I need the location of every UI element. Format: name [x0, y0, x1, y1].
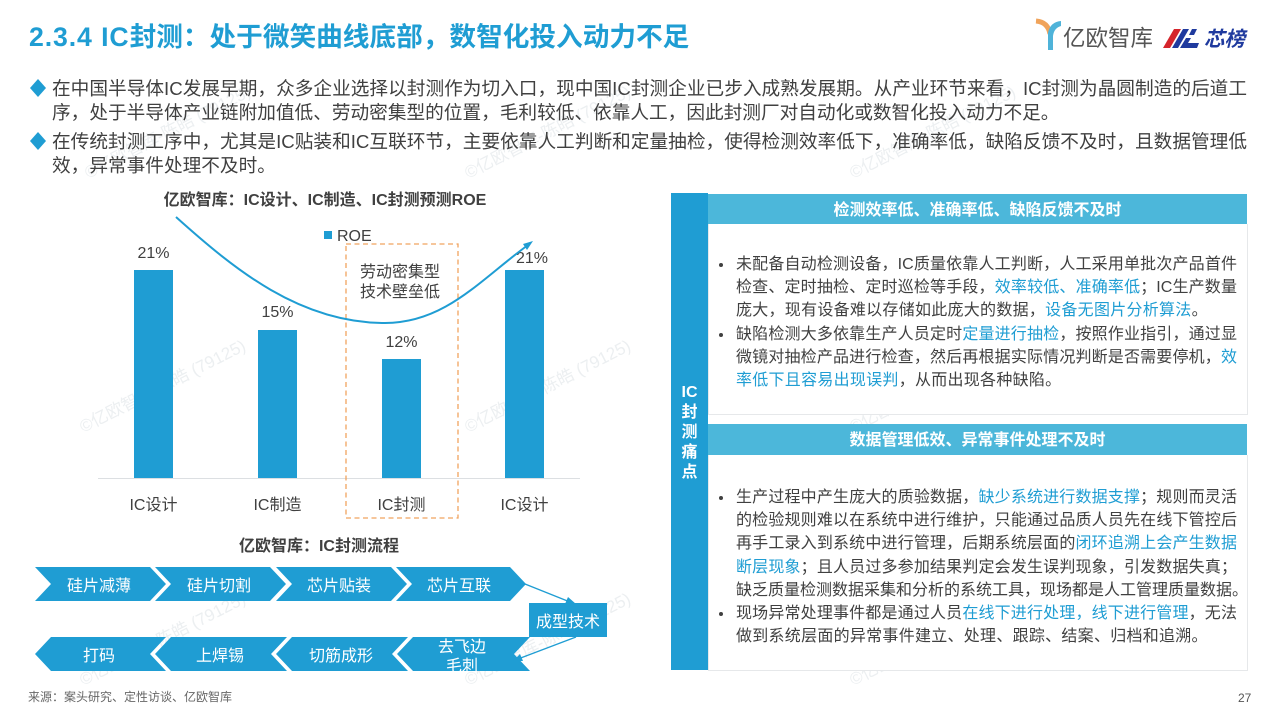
chevron row 1 labels: [67, 577, 491, 595]
chevron row 2: [35, 637, 530, 671]
highlight label: 技术壁垒低: [360, 282, 440, 301]
detection text: [719, 255, 1237, 389]
chevron row 1 labels: 硅片切割: [187, 577, 251, 595]
panel: IC packaging pain points: 点: [681, 464, 698, 481]
data management text: [719, 488, 1248, 645]
legend: ROE: [337, 228, 372, 245]
bullet text block: [52, 78, 1247, 176]
watermarks: ©亿欧智库-陈皓 (79125): [462, 336, 634, 436]
source: 来源：案头研究、定性访谈、亿欧智库: [28, 690, 232, 704]
panel heading: data management: [708, 424, 1247, 455]
chart title: 亿欧智库：IC设计、IC制造、IC封测预测ROE: [164, 190, 487, 209]
chevron row 2 labels: [83, 638, 486, 675]
detection text: 庞大，现有设备难以存储如此庞大的数据，设备无图片分析算法。: [736, 302, 1208, 319]
data management text: 生产过程中产生庞大的质验数据，缺少系统进行数据支撑；规则而灵活: [736, 489, 1237, 506]
flow title: 亿欧智库：IC封测流程: [239, 536, 399, 555]
data management text: 做到系统层面的异常事件建立、处理、跟踪、结案、归档和追溯。: [736, 628, 1208, 645]
data management text: 缺乏质量检测数据采集和分析的系统工具，现场都是人工管理质量数据。: [736, 582, 1248, 599]
highlight label: [360, 263, 440, 301]
watermarks: ©亿欧智库-陈皓 (79125): [77, 589, 249, 689]
chevron row 1: [35, 567, 526, 601]
chevron row 2 labels: 上焊锡: [196, 647, 244, 665]
title: 2.3.4 IC封测：处于微笑曲线底部，数智化投入动力不足: [29, 22, 689, 52]
watermarks: ©亿欧智库-陈皓 (79125): [462, 82, 634, 182]
bullet text block: 效，异常事件处理不及时。: [52, 155, 276, 176]
forming technology box: 成型技术: [536, 613, 600, 631]
logo: Yiou Zhiku and Xinbang: [1036, 18, 1248, 51]
watermarks: ©亿欧智库-陈皓 (79125): [462, 589, 634, 689]
panel box: detection: [708, 224, 1248, 415]
connector arrows: [513, 584, 576, 661]
logo: Yiou Zhiku and Xinbang: 亿欧智库: [1063, 26, 1153, 51]
smile curve arrow: [176, 217, 533, 323]
data management text: 现场异常处理事件都是通过人员在线下进行处理，线下进行管理，无法: [736, 605, 1237, 622]
panel: IC packaging pain points: 痛: [681, 444, 698, 461]
panel: IC packaging pain points: IC: [682, 384, 698, 401]
ROE bar chart: [98, 190, 580, 519]
dashed highlight box: [346, 244, 458, 518]
panel heading: detection: [708, 194, 1247, 224]
category labels: IC设计: [500, 496, 549, 514]
highlight label: 劳动密集型: [360, 263, 440, 281]
category labels: IC制造: [253, 496, 302, 514]
panel heading: detection: 检测效率低、准确率低、缺陷反馈不及时: [833, 202, 1122, 219]
chevron row 1 labels: 芯片互联: [427, 577, 491, 595]
chevron row 2 labels: 打码: [83, 647, 115, 665]
detection text: 未配备自动检测设备，IC质量依靠人工判断，人工采用单批次产品首件: [736, 256, 1237, 273]
panel: IC packaging pain points: 测: [681, 424, 698, 441]
panel: IC packaging pain points: 封: [681, 404, 698, 421]
process flow: [35, 536, 607, 675]
logo: Yiou Zhiku and Xinbang: 芯榜: [1204, 28, 1248, 51]
data management text: 的检验规则难以在系统中进行维护，只能通过品质人员先在线下管控后: [736, 512, 1237, 529]
chevron row 1 labels: 硅片减薄: [67, 577, 131, 595]
watermarks: ©亿欧智库-陈皓 (79125): [82, 82, 254, 182]
chevron row 1 labels: 芯片贴装: [307, 577, 371, 595]
watermarks: ©亿欧智库-陈皓 (79125): [847, 589, 1019, 689]
panel heading: data management: 数据管理低效、异常事件处理不及时: [849, 432, 1106, 449]
value labels: 15%: [261, 304, 294, 321]
panel box: data management: [708, 455, 1248, 671]
value labels: [137, 245, 548, 351]
bullet text block: 序，处于半导体产业链附加值低、劳动密集型的位置，毛利较低、依靠人工，因此封测厂对自动化或数智化投入动力不足。: [52, 102, 1059, 123]
bullet text block: 在中国半导体IC发展早期，众多企业选择以封测作为切入口，现中国IC封测企业已步入成熟发展期。从产业环节来看，IC封测为晶圆制造的后道工: [52, 78, 1247, 99]
value labels: 21%: [516, 250, 548, 267]
watermarks: ©亿欧智库-陈皓 (79125): [847, 336, 1019, 436]
chevron row 2 labels: 去飞边: [438, 638, 486, 656]
bullet text block: 在传统封测工序中，尤其是IC贴装和IC互联环节，主要依靠人工判断和定量抽检，使得检测效率低下，准确率低，缺陷反馈不及时，且数据管理低: [52, 131, 1247, 152]
watermarks: ©亿欧智库-陈皓 (79125): [847, 82, 1019, 182]
value labels: 12%: [385, 334, 418, 351]
data management text: 再手工录入到系统中进行管理，后期系统层面的闭环追溯上会产生数据: [736, 535, 1237, 552]
category labels: IC设计: [129, 496, 178, 514]
bars: [134, 270, 544, 478]
page number: 27: [1238, 691, 1251, 705]
category labels: [129, 496, 549, 514]
detection text: 检查、定时抽检、定时巡检等手段，效率较低、准确率低；IC生产数量: [736, 279, 1237, 296]
detection text: 微镜对抽检产品进行检查，然后再根据实际情况判断是否需要停机，效: [736, 349, 1237, 366]
data management text: 断层现象；且人员过多参加结果判定会发生误判现象，引发数据失真；: [736, 559, 1237, 576]
diamond bullets: [30, 79, 46, 150]
forming technology box: [529, 603, 607, 637]
detection text: 缺陷检测大多依靠生产人员定时定量进行抽检，按照作业指引，通过显: [736, 326, 1237, 343]
value labels: 21%: [137, 245, 170, 262]
watermarks: ©亿欧智库-陈皓 (79125): [77, 336, 249, 436]
chevron row 2 labels: 毛刺: [446, 657, 478, 675]
detection text: 率低下且容易出现误判，从而出现各种缺陷。: [736, 372, 1061, 389]
panel: IC packaging pain points: [671, 193, 708, 670]
chevron row 2 labels: 切筋成形: [309, 647, 373, 665]
category labels: IC封测: [377, 496, 426, 514]
